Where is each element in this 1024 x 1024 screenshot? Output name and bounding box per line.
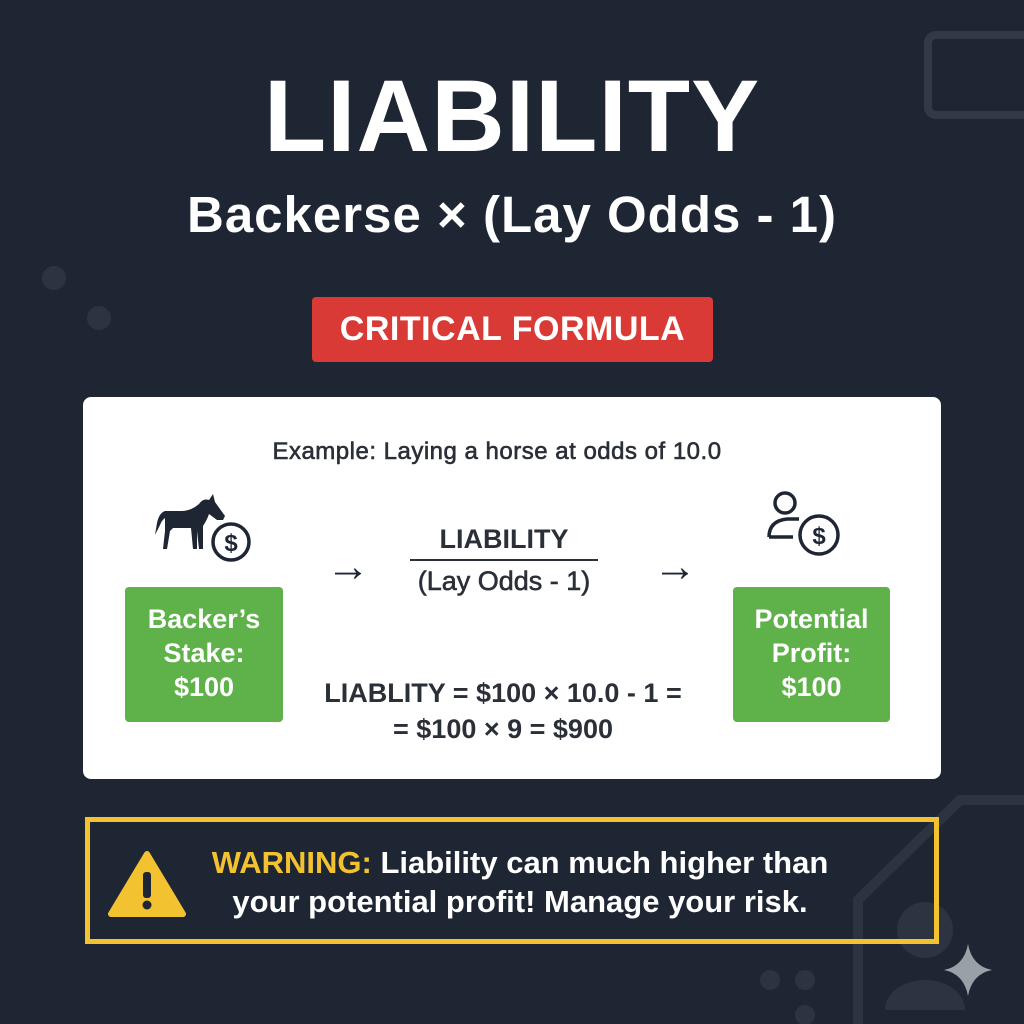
warning text [212,845,828,919]
fraction: LIABILITY [440,524,568,554]
fraction: (Lay Odds - 1) [418,566,590,596]
box: potential profit: Potential [754,604,868,634]
box: backer's stake: Backer’s [148,604,260,634]
badge: critical formula [312,297,713,362]
formula subtitle: Backerse × (Lay Odds - 1) [187,186,837,243]
box: potential profit: Profit: [772,638,851,668]
icon: person with coin: $ [812,523,826,550]
example heading: Example: Laying a horse at odds of 10.0 [272,438,722,465]
warning box [85,817,939,944]
warning text: WARNING: Liability can much higher than [212,845,828,880]
box: backer's stake [125,587,283,722]
icon: horse with coin: $ [224,530,238,557]
fraction [410,524,598,596]
warning text: your potential profit! Manage your risk. [232,884,808,919]
arrow: → [653,542,697,591]
box: backer's stake: $100 [174,672,234,702]
calculation [324,678,682,744]
calculation: = $100 × 9 = $900 [393,714,613,744]
badge: critical formula: CRITICAL FORMULA [340,310,685,348]
box: potential profit [733,587,890,722]
icon: horse with coin [155,494,251,562]
arrow: → [326,542,370,591]
title: LIABILITY [264,59,760,173]
panel: example card [83,397,941,779]
calculation: LIABLITY = $100 × 10.0 - 1 = [324,678,682,708]
box: backer's stake: Stake: [163,638,245,668]
icon: warning triangle [108,851,186,917]
icon: person with coin [767,491,840,556]
box: potential profit: $100 [781,672,842,702]
